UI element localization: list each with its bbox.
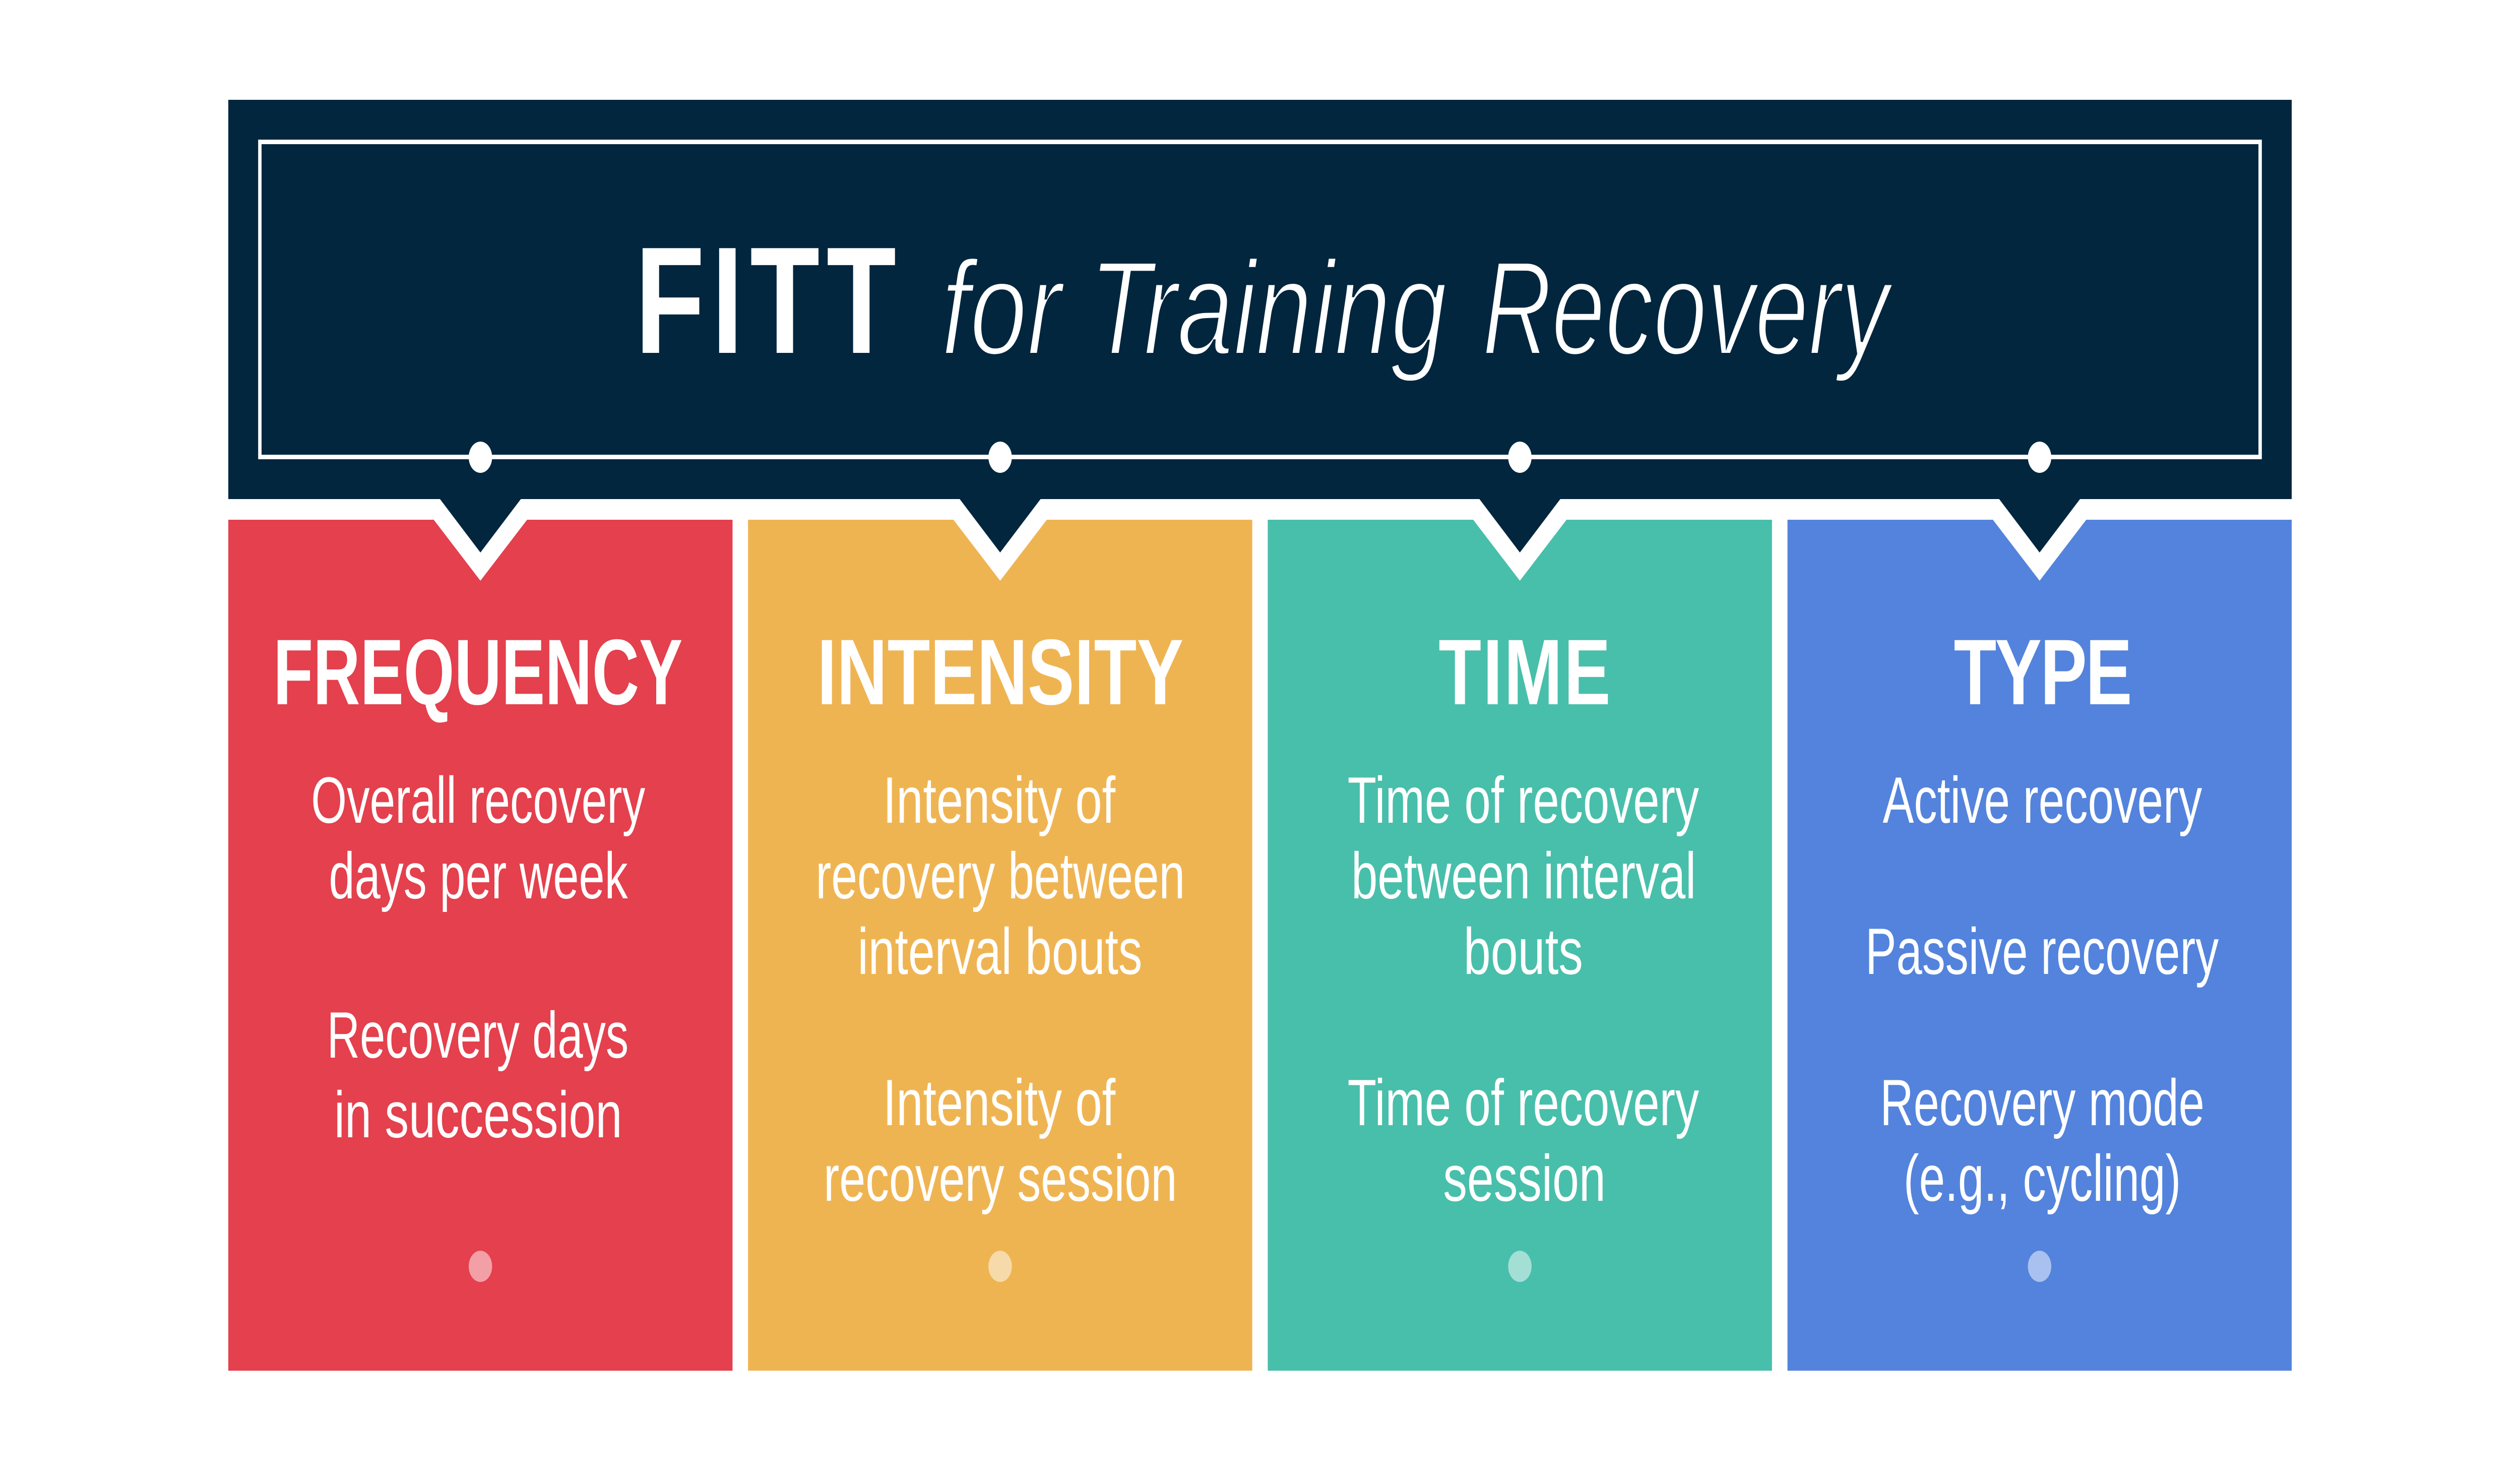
header banner [228, 100, 2292, 553]
type text: recovery mode: (e.g., cycling) [1904, 1142, 2181, 1215]
type text: recovery mode [1880, 1066, 2204, 1215]
type text: active recovery: Active recovery [1883, 764, 2202, 837]
type panel background [1788, 520, 2292, 1371]
intensity text: recovery between bouts: interval bouts [858, 915, 1142, 988]
frequency text: overall recovery days [311, 764, 646, 912]
intensity text: recovery session: Intensity of [883, 1066, 1116, 1139]
frequency panel dot [469, 1251, 492, 1282]
time panel background [1268, 520, 1772, 1371]
banner inner frame [260, 142, 2260, 457]
intensity text: recovery between bouts [815, 764, 1185, 988]
title: FITT: FITT [635, 215, 896, 385]
frequency text: recovery days in succession: in succession [334, 1078, 622, 1151]
frequency text: recovery days in succession: Recovery days [327, 999, 628, 1072]
intensity text: recovery session: recovery session [824, 1142, 1177, 1215]
time text: recovery session [1348, 1066, 1699, 1215]
panel: intensity [748, 520, 1252, 1371]
type text: passive recovery: Passive recovery [1865, 915, 2219, 988]
time heading: TIME [1438, 620, 1611, 724]
time text: recovery between bouts: between interval [1351, 839, 1696, 912]
panel: time [1268, 520, 1772, 1371]
type heading: TYPE [1954, 620, 2132, 724]
intensity text: recovery session [824, 1066, 1177, 1215]
frame dot: intensity [988, 442, 1012, 473]
title: for Training Recovery: Training [1089, 233, 1447, 383]
intensity panel background [748, 520, 1252, 1371]
type panel dot [2028, 1251, 2051, 1282]
frame dot: time [1508, 442, 1532, 473]
title: for Training Recovery [941, 233, 1894, 383]
intensity panel dot [988, 1251, 1012, 1282]
frequency text: overall recovery days: days per week [329, 839, 628, 912]
banner background with four pointers [228, 100, 2292, 553]
time text: recovery between bouts: Time of recovery [1348, 764, 1699, 837]
panel: frequency [228, 520, 732, 1371]
time text: recovery between bouts [1348, 764, 1699, 988]
frame dot: type [2028, 442, 2051, 473]
title: for Training Recovery: Recovery [1482, 233, 1894, 383]
frequency text: recovery days in succession [327, 999, 628, 1151]
intensity text: recovery between bouts: Intensity of [883, 764, 1116, 837]
time text: recovery between bouts: bouts [1464, 915, 1583, 988]
type text: recovery mode: Recovery mode [1880, 1066, 2204, 1139]
title [635, 215, 1894, 385]
time text: recovery session: session [1443, 1142, 1606, 1215]
time text: recovery session: Time of recovery [1348, 1066, 1699, 1139]
intensity text: recovery between bouts: recovery between [815, 839, 1185, 912]
frame dot: frequency [469, 442, 492, 473]
frequency panel background [228, 520, 732, 1371]
title: for Training Recovery: for [941, 233, 1065, 383]
time panel dot [1508, 1251, 1532, 1282]
frequency heading: FREQUENCY [273, 620, 682, 724]
intensity heading: INTENSITY [817, 620, 1183, 724]
frequency text: overall recovery days: Overall recovery [311, 764, 646, 837]
panel: type [1788, 520, 2292, 1371]
